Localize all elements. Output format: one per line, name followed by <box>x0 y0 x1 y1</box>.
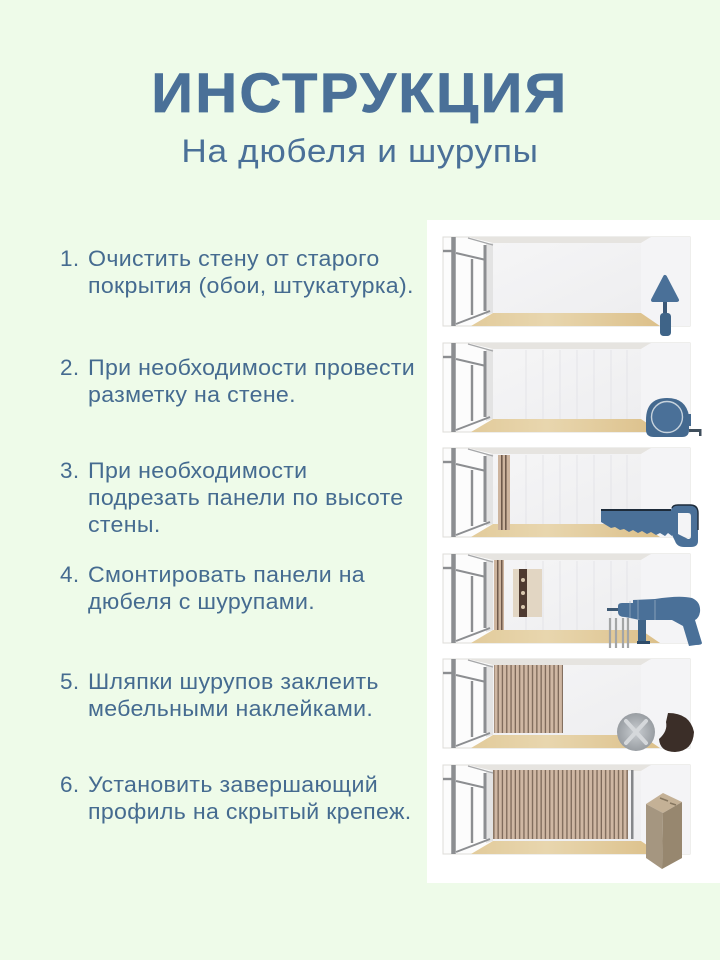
icon: hand saw <box>601 505 698 547</box>
step 3 text: стены. <box>88 512 161 537</box>
step 5 room <box>443 659 690 748</box>
step 3 room <box>443 448 690 537</box>
step 2 room <box>443 343 690 432</box>
step 4 room <box>443 554 690 643</box>
step 6 text: 6. <box>60 772 79 797</box>
step 3 text: подрезать панели по высоте <box>88 485 403 510</box>
step 2 text: разметку на стене. <box>88 382 296 407</box>
icon: metal and wood stickers <box>617 713 694 752</box>
step 2 text <box>60 355 415 407</box>
step 4 text: Смонтировать панели на <box>88 562 365 587</box>
step 3 text: 3. <box>60 458 79 483</box>
subtitle: На дюбеля и шурупы <box>181 133 539 169</box>
step 5 text <box>60 669 379 721</box>
icon: hammer drill and dowels <box>607 597 702 648</box>
step 1 text: 1. <box>60 246 79 271</box>
step 6 text: Установить завершающий <box>88 772 378 797</box>
white illustration panel <box>427 220 720 883</box>
step 2 text: 2. <box>60 355 79 380</box>
step 4 text: дюбеля с шурупами. <box>88 589 315 614</box>
step 1 text <box>60 246 414 298</box>
icon: trowel <box>653 277 677 336</box>
step 5 text: 5. <box>60 669 79 694</box>
step 6 text: профиль на скрытый крепеж. <box>88 799 412 824</box>
icon: tape measure <box>646 398 702 437</box>
title: ИНСТРУКЦИЯ <box>151 61 569 124</box>
step 2 text: При необходимости провести <box>88 355 415 380</box>
step 3 text <box>60 458 403 537</box>
step 6 text <box>60 772 412 824</box>
step 1 text: Очистить стену от старого <box>88 246 380 271</box>
step 3 text: При необходимости <box>88 458 307 483</box>
step 4 text <box>60 562 365 614</box>
step 5 text: мебельными наклейками. <box>88 696 373 721</box>
step 1 room <box>443 237 690 326</box>
step 6 room <box>443 765 690 854</box>
step 5 text: Шляпки шурупов заклеить <box>88 669 379 694</box>
icon: end profile <box>646 793 682 869</box>
step 1 text: покрытия (обои, штукатурка). <box>88 273 414 298</box>
step 4 text: 4. <box>60 562 79 587</box>
